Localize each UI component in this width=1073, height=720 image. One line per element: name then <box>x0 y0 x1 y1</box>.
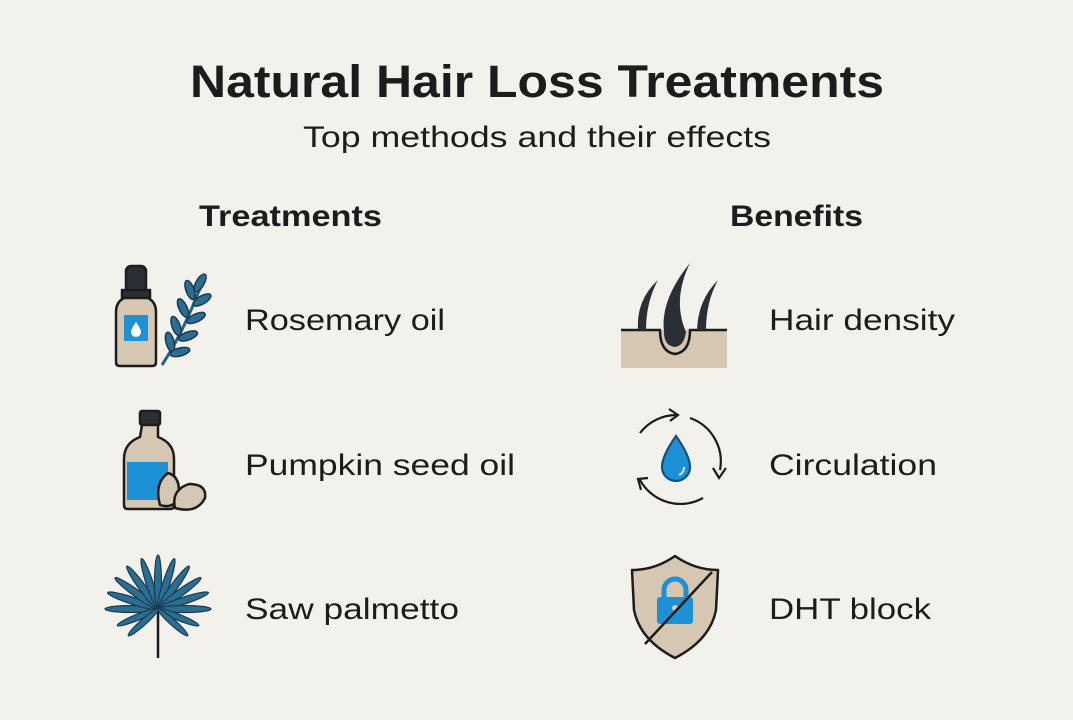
title: Natural Hair Loss Treatments <box>190 56 884 107</box>
icon: rosemary oil <box>116 266 213 366</box>
heading: benefits: Benefits <box>730 200 863 233</box>
heading: treatments: Treatments <box>199 200 382 233</box>
label: pumpkin seed oil: Pumpkin seed oil <box>245 449 515 482</box>
label: DHT block: DHT block <box>769 593 932 626</box>
icon: saw palmetto <box>105 555 211 658</box>
label: hair density: Hair density <box>769 304 955 337</box>
label: rosemary oil: Rosemary oil <box>245 304 445 337</box>
icon: pumpkin seed oil <box>124 411 205 510</box>
subtitle: Top methods and their effects <box>303 121 771 154</box>
icon: circulation <box>638 409 726 504</box>
label: saw palmetto: Saw palmetto <box>245 593 459 626</box>
icon: DHT block shield <box>632 556 718 658</box>
icon: hair density <box>621 263 727 368</box>
label: circulation: Circulation <box>769 449 937 482</box>
